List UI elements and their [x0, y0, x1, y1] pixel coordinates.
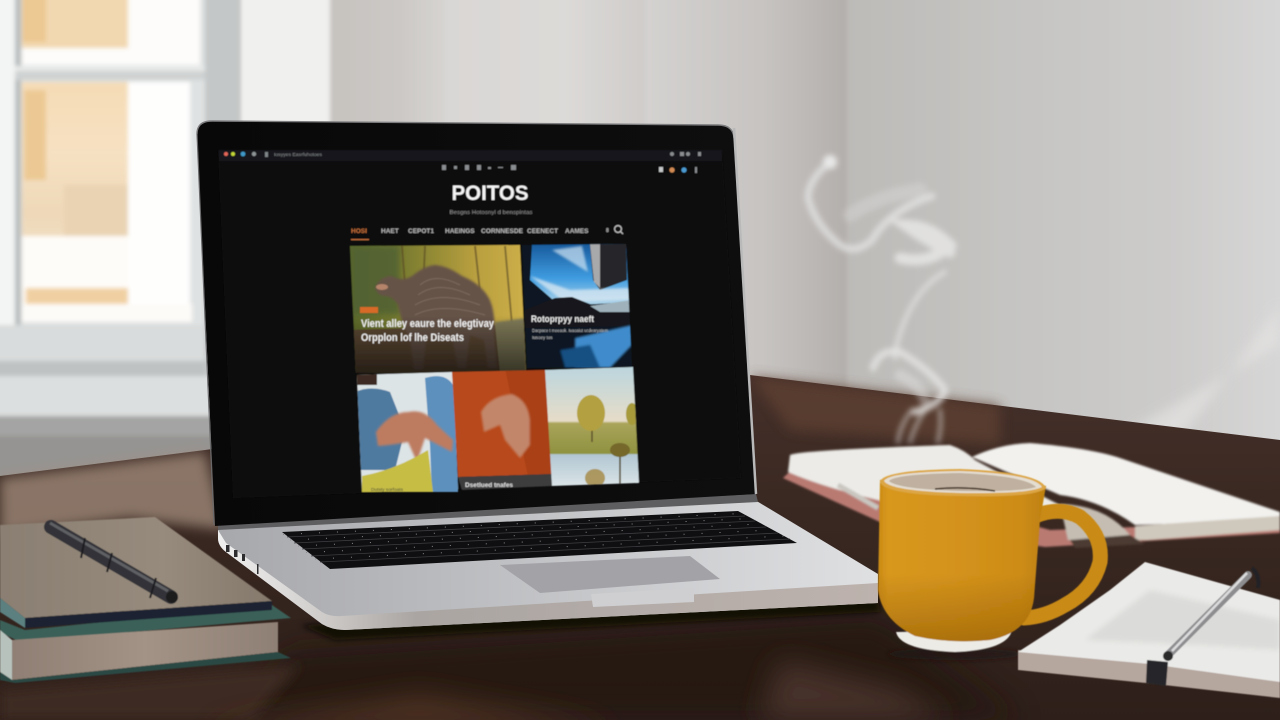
window panes [22, 0, 200, 322]
navigation: CORNNESDE [481, 228, 524, 235]
article summary [532, 328, 608, 340]
navigation: CEENECT [527, 228, 558, 235]
pen [1163, 568, 1258, 661]
navigation: CEPOT1 [408, 228, 434, 235]
coffee mug [878, 469, 1100, 660]
navigation: HOSI [351, 228, 367, 235]
site tagline: Besgns Hotosnyl d benspintas [450, 210, 533, 216]
left pages [788, 445, 1080, 515]
desk [0, 375, 1280, 720]
front notch [591, 588, 694, 607]
mug handle [1024, 511, 1100, 618]
article headline [361, 318, 495, 344]
background wall [0, 0, 1280, 480]
photo: hands in blue shirts [356, 371, 459, 493]
mug body [878, 472, 1046, 641]
right pages [972, 443, 1280, 525]
notepad strap [1146, 660, 1168, 686]
base front edge [218, 530, 878, 630]
article summary: Dacpace t meeaok. Ivaoaiut ucdearyatem [532, 328, 608, 333]
search icon [615, 226, 623, 234]
photo: mountain lake [520, 240, 635, 370]
pen on notebook [50, 523, 178, 603]
mug rim [880, 469, 1046, 496]
caption bar [458, 474, 552, 490]
photo: hands in orange shirt [448, 368, 556, 480]
article headline: Vient alley eaure the elegtivay [361, 318, 495, 330]
notepad block [1018, 650, 1280, 698]
top notebook [0, 517, 272, 628]
keyboard [282, 511, 797, 569]
screen [218, 150, 741, 498]
laptop [197, 121, 880, 640]
trackpad [500, 556, 720, 593]
article title: Rotoprpyy naeft [531, 314, 594, 324]
lower notebook [0, 605, 291, 683]
page stacks [1060, 504, 1132, 540]
stacked notebooks [0, 517, 291, 683]
article headline: Orpplon lof lhe Diseats [361, 332, 464, 344]
mug base [896, 630, 1012, 652]
mug shadow [887, 648, 1023, 660]
navigation: HAEINGS [445, 228, 475, 235]
window [0, 0, 240, 486]
book cover [783, 462, 1280, 547]
steam [808, 155, 950, 442]
photo: tree and meadow [545, 367, 640, 487]
article label [360, 307, 378, 313]
laptop base [218, 494, 880, 640]
navigation: AAMES [565, 228, 589, 235]
usb ports [226, 545, 258, 574]
photo: camel in forest [349, 244, 527, 374]
browser toolbar [219, 150, 722, 173]
wall light streak [1130, 305, 1280, 440]
notepad [1018, 562, 1280, 698]
navigation [351, 226, 623, 240]
open book [783, 443, 1280, 548]
site title: POITOS [452, 182, 528, 205]
navigation: 8 [606, 228, 609, 234]
browser toolbar: Iosyyes Easrfuhotoes [274, 152, 323, 157]
camel [375, 265, 497, 370]
caption: Dutsty sorfoats [371, 487, 404, 493]
laptop lid [197, 121, 756, 526]
caption bar: Dsetlued tnafes [465, 482, 513, 489]
article summary: Iusoey tos [532, 335, 553, 340]
navigation: HAET [381, 228, 399, 235]
